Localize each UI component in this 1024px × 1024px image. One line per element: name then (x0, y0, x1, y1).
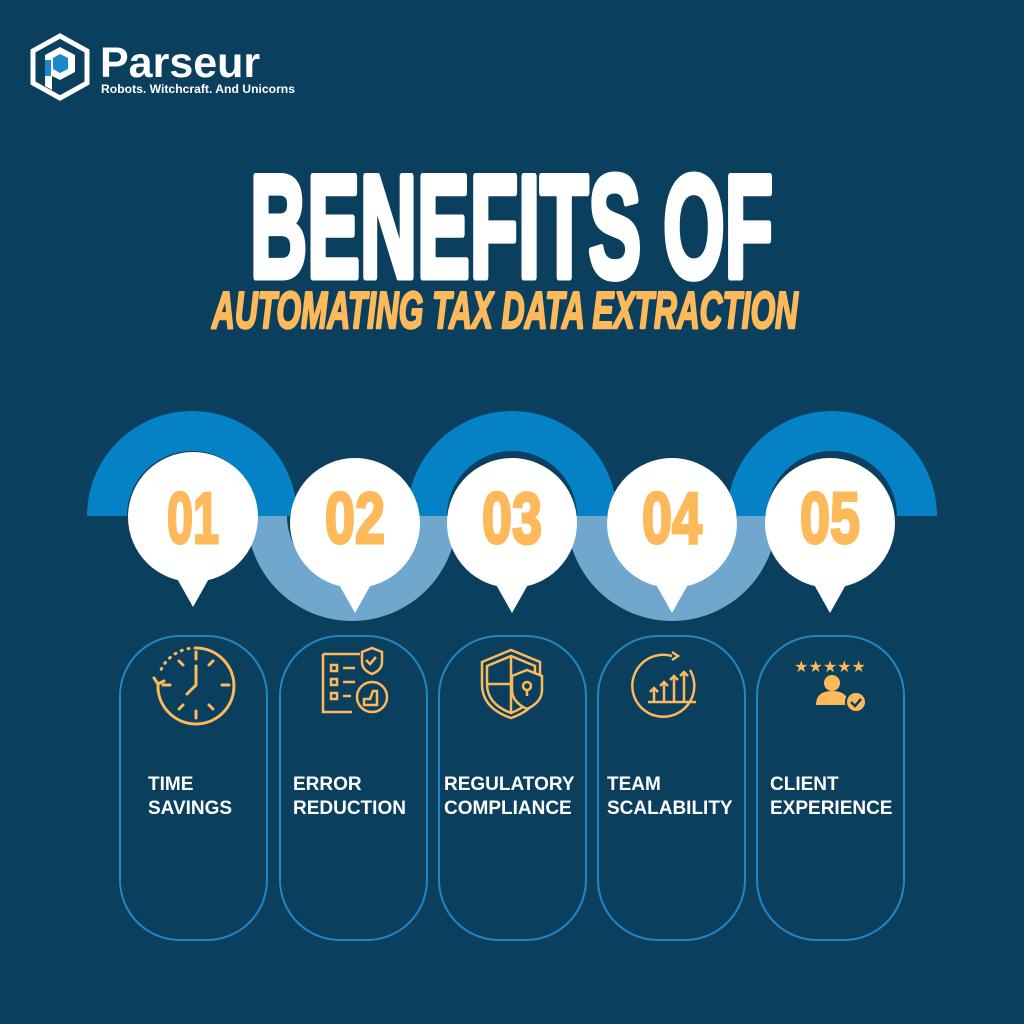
marker 04: 04 (642, 479, 702, 559)
logo tagline: Robots. Witchcraft. And Unicorns (101, 84, 295, 96)
logo wordmark: Parseur (100, 39, 260, 87)
card: time savings (120, 636, 267, 940)
label: CLIENT (770, 774, 839, 795)
card: regulatory compliance: COMPLIANCE (444, 798, 572, 819)
logo (33, 36, 295, 98)
marker 02: 02 (325, 479, 385, 559)
marker 01 (128, 452, 258, 607)
marker 05 (765, 458, 895, 613)
label: TEAM (607, 774, 661, 795)
icon: clock (154, 648, 234, 724)
label: ERROR (293, 774, 362, 795)
icon: rated user (794, 657, 866, 712)
card: error reduction: REDUCTION (293, 798, 406, 819)
icon: growth arrows (632, 652, 696, 717)
marker 02 (290, 458, 420, 613)
icon: hexagon logo (33, 36, 87, 98)
label: REGULATORY (444, 774, 575, 795)
icon: shield lock (482, 650, 542, 718)
card: time savings: SAVINGS (148, 798, 232, 819)
card: client experience: EXPERIENCE (770, 798, 892, 819)
icon: rated user: ★★★★★ (794, 657, 866, 676)
timeline arcs (87, 411, 937, 621)
card: error reduction (280, 636, 427, 940)
card: regulatory compliance (439, 636, 586, 940)
marker 05: 05 (800, 479, 860, 559)
marker 03 (447, 458, 577, 613)
card: team scalability (598, 636, 745, 940)
marker 04 (607, 458, 737, 613)
card: team scalability: SCALABILITY (607, 798, 733, 819)
marker 03: 03 (482, 479, 542, 559)
card: client experience (757, 636, 904, 940)
marker 01: 01 (167, 479, 219, 559)
icon: checklist (323, 648, 387, 712)
label: TIME (148, 774, 193, 795)
